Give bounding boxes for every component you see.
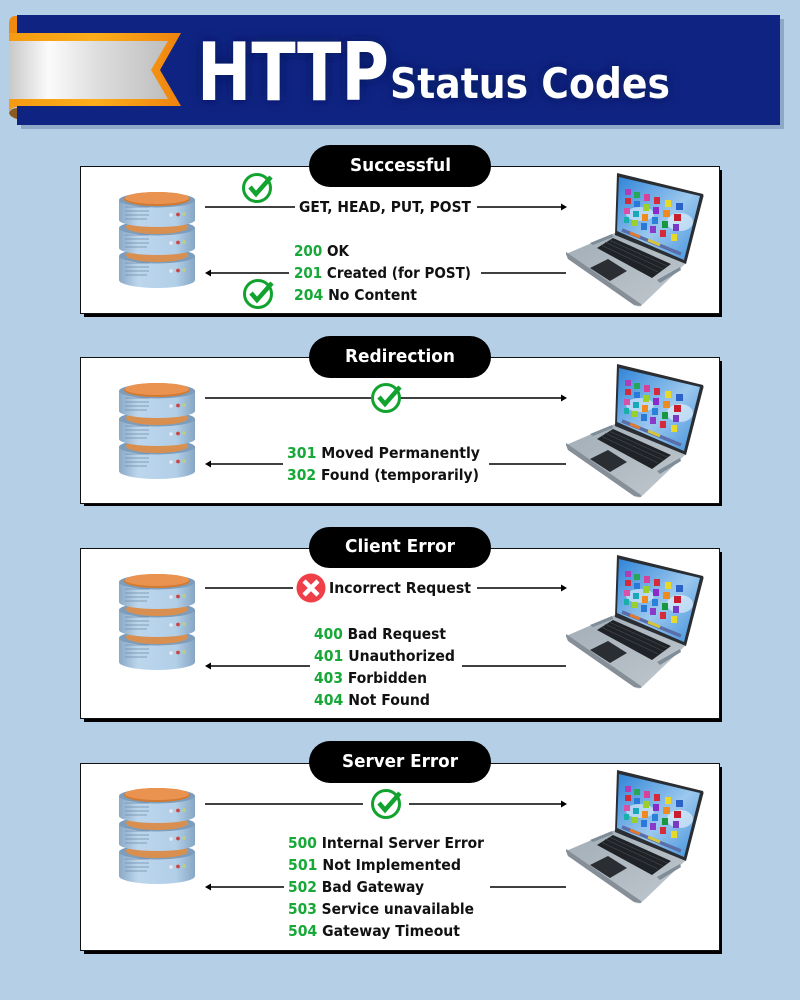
- status codes: [294, 242, 471, 304]
- status codes: 504 Gateway Timeout: [288, 922, 461, 940]
- request label: GET, HEAD, PUT, POST: [299, 198, 471, 216]
- icon: laptop: [566, 555, 704, 688]
- request arrow: [205, 394, 567, 402]
- panel: redirection: [80, 336, 722, 506]
- icon: check: [372, 384, 400, 412]
- icon: check: [372, 790, 400, 818]
- request label: Incorrect Request: [329, 579, 472, 597]
- status codes: 302 Found (temporarily): [287, 466, 479, 484]
- panel: client error: [80, 527, 722, 722]
- heading pill: redirection: [309, 336, 491, 378]
- heading pill: server error: [309, 741, 491, 783]
- heading pill: client error: [309, 527, 491, 568]
- response arrow: [205, 460, 566, 468]
- heading pill: client error: Client Error: [345, 537, 455, 557]
- status codes: 401 Unauthorized: [314, 647, 455, 665]
- panel: server error: [80, 741, 722, 954]
- ribbon: [9, 16, 181, 119]
- heading pill: successful: Successful: [350, 156, 451, 176]
- request arrow: [205, 800, 567, 808]
- icon: server: [119, 788, 195, 884]
- icon: server: [119, 383, 195, 479]
- response arrow: [205, 662, 566, 670]
- status codes: 502 Bad Gateway: [288, 878, 424, 896]
- status codes: 400 Bad Request: [314, 625, 447, 643]
- icon: error cross: [296, 574, 326, 602]
- icon: laptop: [566, 770, 704, 903]
- status codes: 200 OK: [294, 242, 350, 260]
- icon: check top: [244, 174, 271, 202]
- status codes: 404 Not Found: [314, 691, 430, 709]
- icon: check bottom: [244, 280, 272, 308]
- status codes: 501 Not Implemented: [288, 856, 461, 874]
- response arrow: [205, 270, 566, 276]
- heading pill: server error: Server Error: [342, 752, 458, 772]
- status codes: 403 Forbidden: [314, 669, 427, 687]
- status codes: 201 Created (for POST): [294, 264, 471, 282]
- icon: laptop: [566, 364, 704, 497]
- heading pill: redirection: Redirection: [345, 347, 455, 367]
- status codes: [288, 834, 484, 940]
- status codes: [287, 444, 480, 484]
- icon: laptop: [566, 173, 704, 306]
- title shadow: HTTP: [197, 26, 389, 119]
- status codes: 301 Moved Permanently: [287, 444, 480, 462]
- icon: server: [119, 574, 195, 670]
- title subtitle: Status Codes: [390, 59, 670, 108]
- status codes: 503 Service unavailable: [288, 900, 474, 918]
- response arrow: [205, 884, 566, 890]
- status codes: 204 No Content: [294, 286, 418, 304]
- request arrow: [205, 584, 567, 592]
- heading pill: successful: [309, 145, 491, 187]
- icon: server: [119, 192, 195, 288]
- request arrow: [205, 204, 567, 210]
- title HTTP: HTTP: [197, 26, 389, 119]
- title subtitle shadow: Status Codes: [390, 59, 670, 108]
- status codes: 500 Internal Server Error: [288, 834, 484, 852]
- status codes: [314, 625, 455, 709]
- panel: successful: [80, 145, 722, 317]
- title banner: [9, 15, 784, 129]
